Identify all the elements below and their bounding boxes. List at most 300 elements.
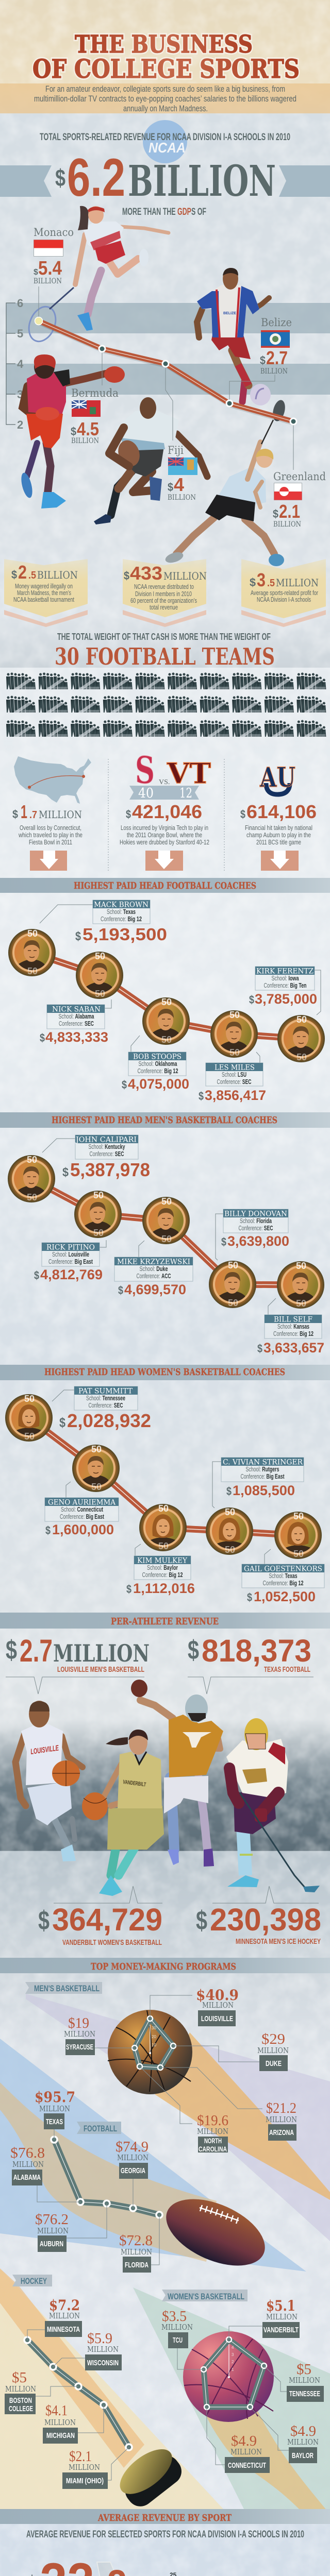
program: Georgia	[116, 2139, 148, 2179]
tag: hockey: HOCKEY	[21, 2276, 47, 2286]
label: Bob Stoops: BOB STOOPS	[133, 1053, 182, 1061]
value: Louisville: LOUISVILLE MEN'S BASKETBALL	[57, 1665, 144, 1674]
NCAA logo	[143, 120, 187, 163]
program: Syracuse	[64, 2015, 95, 2055]
coin: Nick Saban: 50	[95, 989, 105, 999]
program: Boston College	[5, 2369, 36, 2414]
label: Pat Summitt: School: Tennessee	[86, 1394, 125, 1402]
value: Minnesota	[196, 1886, 321, 1946]
value: Minnesota: 230,398	[210, 1902, 321, 1937]
icon: women's basketball with radar chart: 4	[232, 2345, 234, 2350]
label: Geno Auriemma: Conference: Big East	[60, 1513, 104, 1520]
value: Billy Donovan: $	[221, 1235, 226, 1248]
athlete: soccer player: BELIZE	[223, 312, 236, 315]
coin: Les Miles	[210, 1010, 258, 1058]
panel: GDP comparison chart	[6, 206, 330, 566]
program: TCU: TCU	[173, 2336, 183, 2345]
label: Mack Brown: School: Texas	[107, 908, 136, 916]
sport: football	[27, 2552, 133, 2576]
program: Minnesota: MINNESOTA	[47, 2325, 80, 2334]
program: Vanderbilt: MILLION	[266, 2312, 298, 2321]
label: Geno Auriemma: GENO AURIEMMA	[48, 1498, 116, 1506]
callout: illegal wagers: BILLION	[37, 569, 78, 581]
program: TCU: MILLION	[161, 2323, 193, 2332]
icon: women's basketball with radar chart: 1	[232, 2367, 234, 2372]
program: Georgia: GEORGIA	[121, 2166, 145, 2175]
label: John Calipari: School: Kentucky	[89, 1143, 125, 1150]
callout: illegal wagers: NCAA basketball tournament	[13, 596, 74, 603]
backdrop: men's ball trail	[155, 2032, 330, 2200]
label: Bob Stoops	[128, 1052, 186, 1076]
callout: NCAA revenue: total revenue	[150, 604, 178, 611]
loss: Connecticut: Fiesta Bowl in 2011	[29, 838, 72, 846]
coin: Rick Pitino: 50	[93, 1228, 104, 1238]
callout: illegal wagers: March Madness, the men’s	[17, 589, 71, 597]
callout: NCAA revenue: 60 percent of the organization’s	[130, 597, 197, 604]
coin: Pat Summitt	[5, 1394, 53, 1442]
athlete: football player	[131, 1680, 223, 1867]
icon: hockey puck with radar line	[24, 2337, 187, 2512]
value: Les Miles: 3,856,417	[205, 1088, 266, 1103]
value: Gail Goestenkors: 1,052,500	[254, 1589, 316, 1604]
coin: Mike Krzyzewski: 50	[161, 1234, 172, 1244]
value: Pat Summitt: $	[59, 1415, 65, 1430]
program: Auburn: $76.2	[35, 2211, 69, 2228]
ribbon	[0, 165, 330, 197]
coin: Mack Brown: 50	[27, 966, 38, 976]
program: Alabama: MILLION	[12, 2160, 44, 2169]
panel: weight of cash	[6, 631, 326, 737]
program: Boston College: COLLEGE	[9, 2404, 33, 2413]
panel: average revenue by sport	[0, 2509, 330, 2576]
coin: Bob Stoops: 50	[161, 997, 172, 1007]
coin: Bob Stoops	[142, 997, 190, 1045]
value: Mike Krzyzewski: 4,699,570	[124, 1282, 186, 1297]
value: Gail Goestenkors: $	[247, 1591, 252, 1604]
panel: per-athlete revenue	[0, 1613, 330, 1947]
big figure	[55, 148, 276, 208]
label: Les Miles: Conference: SEC	[217, 1078, 252, 1086]
callout: illegal wagers: .5	[28, 570, 36, 581]
title: THE BUSINESS	[75, 30, 253, 59]
coin: Bill Self: 50	[296, 1261, 306, 1271]
intro text	[34, 84, 296, 113]
panel: football coaches	[0, 878, 330, 1103]
loss: Virginia Tech: Loss incurred by Virginia Tech to play in	[121, 824, 208, 832]
icon: Auburn logo: AU	[259, 762, 295, 793]
country: Monaco: $	[34, 268, 38, 277]
coin: Kirk Ferentz: 50	[296, 1052, 307, 1062]
athlete: rugby player	[94, 397, 207, 524]
country: Belize: $	[260, 354, 266, 367]
icon: football with radar line	[51, 2137, 275, 2279]
coin: Bill Self: 50	[296, 1298, 306, 1309]
section heading bar	[0, 1112, 330, 1128]
label: Kirk Ferentz	[255, 967, 315, 990]
program: Louisville: MILLION	[202, 2001, 234, 2010]
athlete: boxer	[19, 354, 125, 509]
value: Kirk Ferentz: 3,785,000	[255, 991, 317, 1007]
loss: Connecticut: .7	[29, 809, 37, 821]
value: Texas: 818,373	[202, 1633, 311, 1668]
coin: C. Vivian Stringer: 50	[225, 1545, 235, 1555]
loss: Connecticut: 1	[21, 801, 27, 822]
tag: hockey	[12, 2275, 52, 2286]
coin: John Calipari: 50	[27, 1192, 37, 1202]
country: Greenland: $	[273, 507, 278, 520]
program: Alabama	[10, 2145, 45, 2185]
value: Nick Saban: 4,833,333	[45, 1029, 108, 1045]
country: Monaco: 5.4	[38, 258, 62, 279]
country: Fiji: Fiji	[168, 444, 184, 456]
country: Fiji	[168, 444, 197, 502]
program: Duke	[257, 2031, 289, 2071]
value: Rick Pitino: 4,812,769	[40, 1267, 103, 1282]
value: C. Vivian Stringer: 1,085,500	[233, 1483, 295, 1498]
label: Rick Pitino: RICK PITINO	[46, 1244, 95, 1252]
label: Kim Mulkey: School: Baylor	[147, 1564, 178, 1571]
athlete: women's basketball player: VANDERBILT	[123, 1779, 146, 1788]
label: C. Vivian Stringer	[221, 1458, 304, 1482]
icon: women's basketball with radar chart: 3	[232, 2352, 234, 2357]
program: Louisville: $40.9	[196, 1987, 239, 2004]
athlete: men's basketball player	[15, 1701, 82, 1861]
program: Minnesota	[45, 2297, 82, 2337]
label: Kim Mulkey: KIM MULKEY	[137, 1557, 188, 1565]
icon: basketball with radar chart	[108, 2010, 192, 2094]
value: Texas	[188, 1633, 314, 1694]
big figure: $	[55, 164, 65, 191]
label: Mack Brown	[93, 900, 150, 924]
country: Fiji: 4	[174, 474, 184, 495]
program: Miami (Ohio): $2.1	[69, 2448, 92, 2465]
coin: Rick Pitino	[74, 1190, 122, 1238]
value: Geno Auriemma: 1,600,000	[52, 1522, 114, 1537]
program: Arizona: MILLION	[266, 2115, 297, 2124]
leader lines: hockey	[27, 2330, 129, 2480]
program: Auburn: AUBURN	[40, 2240, 63, 2248]
coin: Geno Auriemma: 50	[91, 1444, 102, 1454]
country: Greenland: BILLION	[273, 520, 301, 529]
NCAA logo: NCAA	[148, 140, 186, 156]
leader lines: football	[37, 2129, 159, 2265]
country: Monaco: BILLION	[34, 277, 62, 285]
value: Louisville	[6, 1633, 150, 1694]
section heading bar: PER-ATHLETE REVENUE	[111, 1616, 219, 1627]
leader lines: men's basketball	[95, 1995, 262, 2124]
illustration: dollar bills	[86, 2562, 284, 2576]
loss: Virginia Tech: the 2011 Orange Bowl, where the	[127, 831, 202, 839]
value: Bob Stoops: $	[122, 1078, 127, 1091]
country: Belize: BILLION	[260, 367, 288, 376]
loss: Auburn	[240, 801, 317, 871]
coin: Geno Auriemma: 50	[91, 1482, 102, 1492]
coin: Mack Brown	[8, 928, 56, 976]
program: Minnesota: $7.2	[49, 2297, 80, 2314]
coin: Geno Auriemma	[72, 1444, 120, 1492]
country: Monaco	[34, 226, 74, 285]
section heading bar: TOP MONEY-MAKING PROGRAMS	[91, 1961, 236, 1972]
backdrop: football trail	[0, 2082, 217, 2262]
value: Les Miles: $	[199, 1090, 204, 1103]
label: Gail Goestenkors: School: Texas	[269, 1572, 297, 1580]
label: Pat Summitt	[74, 1386, 138, 1410]
country: Fiji: $	[168, 481, 173, 494]
section heading bar	[0, 1365, 330, 1380]
value: Louisville: $	[6, 1635, 17, 1665]
value: Vanderbilt	[38, 1886, 162, 1947]
callout: average profit: MILLION	[276, 577, 319, 589]
program: Florida: FLORIDA	[125, 2261, 148, 2269]
coin: Gail Goestenkors: 50	[293, 1511, 304, 1521]
label: Nick Saban	[47, 1005, 105, 1029]
label: Gail Goestenkors: GAIL GOESTENKORS	[244, 1565, 322, 1573]
connector lines	[39, 286, 293, 470]
icon: Stanford vs Virginia Tech logos: VT	[167, 757, 211, 790]
value: Mack Brown: $	[75, 929, 81, 943]
coin: Gail Goestenkors: 50	[293, 1549, 304, 1559]
icon: Stanford vs Virginia Tech logos: S	[135, 748, 155, 792]
label: Mack Brown: MACK BROWN	[94, 901, 148, 909]
value: Kim Mulkey: $	[126, 1583, 131, 1596]
panel: header	[0, 30, 330, 113]
program: North Carolina: CAROLINA	[199, 2145, 227, 2153]
label: Mike Krzyzewski: MIKE KRZYZEWSKI	[117, 1258, 190, 1266]
label: Bill Self: School: Kansas	[277, 1323, 309, 1330]
program: Baylor	[287, 2423, 319, 2463]
trend line	[39, 321, 295, 423]
icon grid: football teams	[6, 673, 326, 737]
label: John Calipari: JOHN CALIPARI	[75, 1136, 137, 1144]
backdrop: blue streak	[0, 2039, 306, 2272]
tag: women's basketball: WOMEN'S BASKETBALL	[168, 2292, 244, 2301]
program: Auburn	[35, 2211, 69, 2252]
panel: three money callouts	[4, 559, 326, 627]
coin: John Calipari	[8, 1155, 55, 1202]
country: Belize: Belize	[261, 316, 292, 329]
value: Texas: $	[188, 1635, 199, 1665]
callout: illegal wagers: Money wagered illegally on	[15, 583, 73, 590]
athlete: badminton player	[164, 399, 287, 566]
axis: 2	[17, 418, 23, 431]
backdrop: women's ball trail	[206, 2411, 330, 2514]
program: Auburn: MILLION	[37, 2226, 69, 2235]
section heading bar: AVERAGE REVENUE BY SPORT	[97, 2513, 232, 2523]
program: Michigan: MICHIGAN	[46, 2431, 75, 2440]
callout: average profit: NCAA Division I-A schools	[257, 596, 311, 603]
program: Minnesota: MILLION	[49, 2311, 80, 2320]
label: Nick Saban: School: Alabama	[59, 1012, 94, 1020]
coin: Mike Krzyzewski	[142, 1196, 190, 1244]
panel: top money-making programs	[0, 1958, 330, 2514]
icon: Stanford vs Virginia Tech logos: 40	[138, 786, 154, 801]
panel: total revenue	[0, 120, 330, 217]
country: Belize	[260, 316, 292, 376]
program: North Carolina: $19.6	[197, 2112, 228, 2129]
tag: men's basketball	[25, 1982, 102, 1994]
callout: NCAA revenue	[123, 559, 207, 627]
program: Wisconsin	[85, 2330, 122, 2370]
program: Duke: DUKE	[266, 2059, 282, 2068]
label: Geno Auriemma	[45, 1498, 119, 1521]
value: Mike Krzyzewski: $	[118, 1284, 123, 1297]
loss: Auburn: $	[240, 808, 245, 821]
label: Les Miles	[206, 1063, 263, 1086]
coin: Nick Saban	[76, 951, 123, 999]
big figure: 6.2	[67, 148, 125, 208]
program: Texas	[35, 2089, 75, 2129]
coin: Kim Mulkey	[139, 1503, 187, 1551]
coin: Les Miles: 50	[229, 1047, 240, 1058]
program: Louisville: LOUISVILLE	[201, 2014, 233, 2023]
coin: Les Miles: 50	[229, 1010, 240, 1020]
value: John Calipari: 5,387,978	[70, 1159, 150, 1180]
label: Pat Summitt: PAT SUMMITT	[78, 1387, 133, 1395]
program: Georgia: $74.9	[116, 2139, 148, 2155]
program: Alabama: ALABAMA	[13, 2173, 41, 2182]
label: C. Vivian Stringer: C. VIVIAN STRINGER	[223, 1458, 303, 1466]
callout: NCAA revenue: NCAA revenue distributed to	[134, 583, 194, 590]
label: Bill Self: Conference: Big 12	[273, 1330, 314, 1337]
athlete: women's basketball player	[82, 1730, 164, 1896]
coin: Mike Krzyzewski: 50	[161, 1196, 172, 1207]
coin: Bob Stoops: 50	[161, 1035, 172, 1045]
label: Les Miles: School: LSU	[222, 1071, 246, 1078]
leader lines	[42, 1139, 276, 1315]
program: Boston College: MILLION	[5, 2384, 36, 2394]
label: Les Miles: LES MILES	[214, 1063, 255, 1072]
athlete: soccer player	[197, 268, 271, 405]
axis	[6, 297, 24, 431]
loss: Auburn: 614,106	[246, 801, 317, 822]
label: Geno Auriemma: School: Connecticut	[61, 1505, 103, 1513]
value: Vanderbilt: 364,729	[52, 1902, 162, 1937]
value: Geno Auriemma: $	[45, 1524, 51, 1537]
program: Texas: TEXAS	[46, 2117, 63, 2126]
program: Miami (Ohio): MILLION	[69, 2463, 100, 2472]
athlete: tennis player	[24, 206, 169, 345]
callout: NCAA revenue: $	[124, 569, 129, 582]
loss: Virginia Tech: 421,046	[132, 801, 202, 822]
program: Connecticut: CONNECTICUT	[228, 2461, 266, 2470]
label: Bill Self: BILL SELF	[274, 1316, 312, 1324]
program: Georgia: MILLION	[117, 2153, 148, 2162]
program: Tennessee	[287, 2361, 324, 2402]
value: Bill Self: $	[257, 1342, 262, 1355]
value: C. Vivian Stringer: $	[226, 1485, 232, 1498]
program: TCU	[161, 2308, 193, 2348]
tag: football	[77, 2122, 121, 2134]
coach connector line	[31, 1179, 301, 1285]
coin: Pat Summitt: 50	[24, 1394, 35, 1404]
value: Mack Brown: 5,193,500	[82, 925, 167, 944]
loss: Virginia Tech: Hokies were drubbed by Stanford 40-12	[120, 838, 209, 846]
callout: NCAA revenue: Division I members in 2010	[135, 590, 192, 598]
section heading bar: HIGHEST PAID HEAD FOOTBALL COACHES	[74, 880, 256, 891]
country: Bermuda	[71, 387, 119, 445]
value: Louisville: 2.7	[20, 1633, 53, 1668]
label: C. Vivian Stringer: School: Rutgers	[245, 1465, 279, 1473]
label: Billy Donovan: BILLY DONOVAN	[224, 1210, 287, 1218]
value: Kirk Ferentz: $	[249, 993, 254, 1006]
callout: average profit: $	[250, 576, 256, 589]
axis: 6	[17, 297, 23, 310]
label: Rick Pitino	[42, 1243, 100, 1266]
label: Kim Mulkey	[134, 1556, 191, 1580]
program: Michigan: $4.1	[45, 2402, 68, 2419]
program: Arizona: ARIZONA	[269, 2128, 294, 2137]
value: Bill Self: 3,633,657	[263, 1340, 324, 1355]
program: Duke: $29	[261, 2031, 285, 2047]
tag: men's basketball: MEN'S BASKETBALL	[34, 1984, 100, 1993]
country: Bermuda: 4.5	[77, 418, 99, 439]
program: Arizona: $21.2	[266, 2100, 296, 2116]
backdrop: hockey field	[0, 2268, 223, 2509]
country: Greenland	[273, 470, 326, 529]
program: North Carolina: NORTH	[204, 2137, 222, 2145]
coin: Mack Brown: 50	[27, 928, 38, 939]
value: Louisville: MILLION	[53, 1639, 150, 1667]
icon: basketball with radar chart: 10	[152, 2043, 156, 2047]
icon: Stanford vs Virginia Tech logos: VS.	[159, 778, 170, 786]
axis: 4	[17, 358, 24, 370]
label: John Calipari: Conference: SEC	[90, 1150, 124, 1158]
label: Gail Goestenkors	[242, 1564, 324, 1588]
program: Connecticut: $4.9	[231, 2433, 257, 2449]
label: Billy Donovan: Conference: SEC	[238, 1224, 273, 1232]
program: Tennessee: MILLION	[289, 2376, 320, 2385]
callout: illegal wagers: $	[11, 568, 17, 581]
coin: Billy Donovan: 50	[228, 1298, 238, 1308]
label: Gail Goestenkors: Conference: Big 12	[263, 1579, 303, 1587]
section heading bar	[0, 878, 330, 893]
icon: women's basketball with radar chart: 2	[232, 2360, 234, 2364]
country: Monaco: Monaco	[34, 226, 74, 239]
coin: Bill Self	[277, 1261, 324, 1309]
loss: Connecticut	[12, 801, 82, 871]
section heading bar	[0, 2509, 330, 2524]
loss: Connecticut: $	[12, 808, 18, 821]
program: Wisconsin: $5.9	[87, 2330, 112, 2347]
coin: Nick Saban: 50	[95, 951, 105, 961]
program: Florida	[119, 2232, 153, 2273]
country: Bermuda: $	[71, 425, 76, 438]
title	[32, 30, 300, 84]
panel: men's basketball coaches	[0, 1112, 330, 1355]
label: Mike Krzyzewski	[114, 1257, 193, 1281]
leader lines	[52, 1390, 271, 1564]
program: Boston College: BOSTON	[9, 2396, 32, 2405]
coin: Kim Mulkey: 50	[158, 1503, 169, 1514]
program: Miami (Ohio)	[62, 2448, 108, 2489]
label: Billy Donovan: School: Florida	[240, 1217, 272, 1225]
label: Rick Pitino: School: Louisville	[52, 1250, 89, 1258]
coin: John Calipari: 50	[27, 1155, 37, 1165]
loss: Auburn: champ Auburn to play in the	[246, 831, 311, 839]
program: Alabama: $76.8	[10, 2145, 45, 2161]
coin: Kim Mulkey: 50	[158, 1541, 169, 1551]
athlete: hockey player	[226, 1718, 320, 1892]
program: TCU: $3.5	[162, 2308, 187, 2325]
tag: football: FOOTBALL	[84, 2124, 117, 2133]
label: Kim Mulkey: Conference: Big 12	[142, 1571, 183, 1579]
label: Bob Stoops: School: Oklahoma	[138, 1060, 177, 1067]
loss: Connecticut: which traveled to play in the	[18, 831, 82, 839]
backdrop: green field	[133, 2287, 330, 2509]
icon: Stanford vs Virginia Tech logos	[129, 748, 211, 801]
label: C. Vivian Stringer: Conference: Big East	[240, 1472, 285, 1480]
loss: Auburn: 2011 BCS title game	[256, 838, 301, 846]
